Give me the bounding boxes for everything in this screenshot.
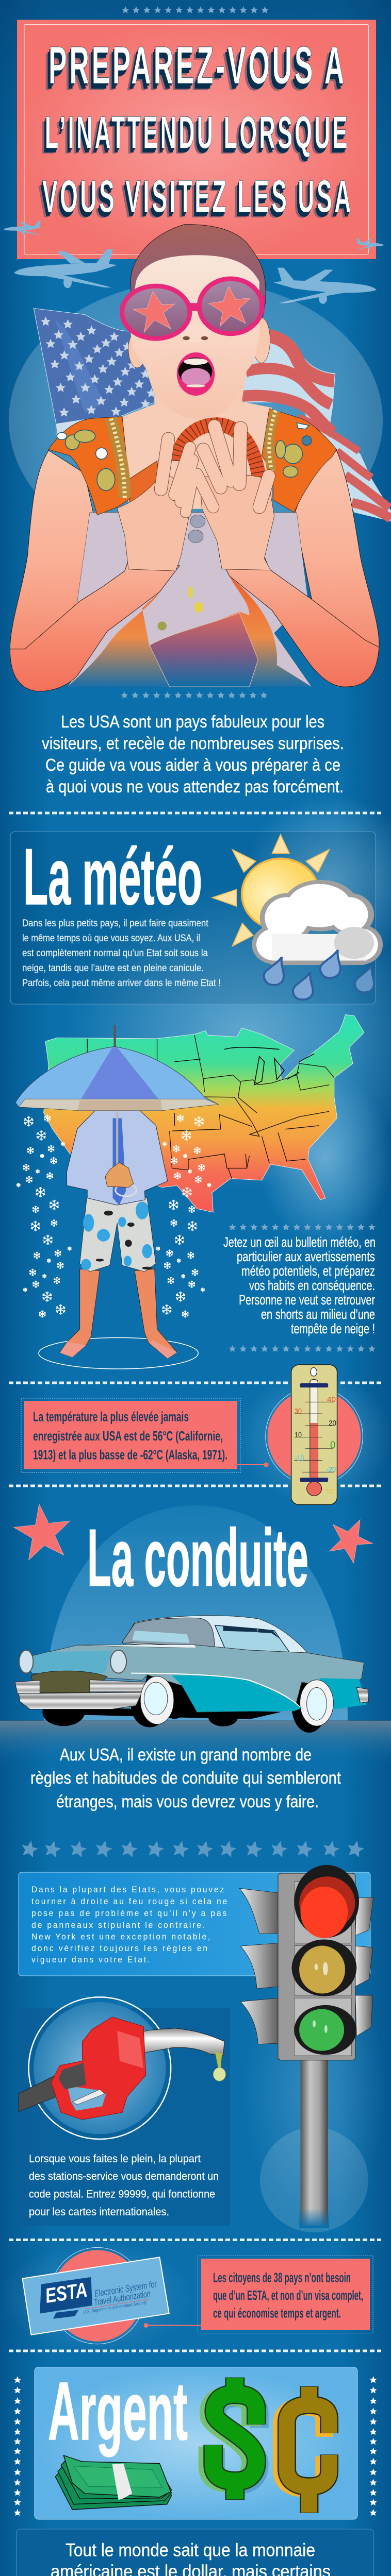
visors: [292, 1865, 359, 2055]
shorts: [80, 1198, 156, 1272]
teal fins: [172, 1675, 302, 1712]
text: feu rouge: New York est une exception notable,: [31, 1932, 211, 1941]
text: code postal: pour les cartes internationales.: [29, 2206, 169, 2218]
panel: code postal: [18, 2008, 230, 2226]
star row: after hero: [121, 691, 267, 699]
icon: planes: [4, 221, 384, 304]
text: conduite intro: [30, 1745, 341, 1811]
text: météo: le même temps où que vous soyez. Aux USA, il: [22, 933, 200, 944]
ears: [128, 317, 270, 368]
hair: [129, 225, 266, 335]
icon: cent sign: [282, 2386, 329, 2513]
text: météo: est complètement normal qu’un Etat soit sous la: [22, 948, 208, 959]
star row: top: [122, 6, 268, 13]
title: [38, 36, 353, 227]
shirt: [67, 1106, 168, 1205]
tires and underbody: [42, 1675, 327, 1733]
star row: driving: [20, 1839, 365, 1858]
disc: [29, 1997, 171, 2139]
face: [129, 255, 259, 419]
trigger opening: [68, 2086, 106, 2111]
rain drops: [264, 950, 374, 999]
text: conduite intro: Aux USA, il existe un grand nombre de: [60, 1745, 312, 1764]
text: conduite intro: règles et habitudes de conduite qui sembleront: [30, 1768, 341, 1787]
forearms: [10, 556, 379, 691]
state lines: [87, 1035, 334, 1179]
text: météo: [22, 918, 221, 989]
callout: temperature: [21, 1398, 268, 1472]
green light: [299, 2009, 344, 2051]
text: météo: Dans les plus petits pays, il peut faire quasiment: [22, 918, 209, 929]
windshield: [122, 1618, 215, 1648]
flower top details: [158, 586, 203, 631]
flag: stripes: [242, 330, 391, 521]
bag pouch: [150, 613, 258, 687]
wheels: [140, 1676, 333, 1726]
hero illustration: woman with flag: [9, 225, 391, 691]
illustration: traffic light: [239, 1865, 373, 2228]
bag straps: [68, 577, 312, 687]
halo behind la conduite: [44, 1505, 348, 1721]
callout: temperature: 1913) et la plus basse de -62°C (Alaska, 1971).: [33, 1447, 227, 1462]
text: feu rouge: pose pas de problème et qu’il n’y a pas: [31, 1908, 228, 1918]
icon: ESTA card: Electronic System for: [93, 2279, 158, 2299]
pole: [299, 2058, 329, 2228]
text: code postal: des stations-service vous demanderont un: [29, 2170, 219, 2182]
panel: argent: [35, 2367, 357, 2519]
intro text: [42, 712, 344, 796]
sun disc: [242, 858, 319, 929]
roof: [122, 1616, 308, 1654]
dress right: [262, 409, 337, 513]
icon: sun, cloud and rain: [213, 835, 383, 999]
man under umbrella: [39, 1106, 198, 1369]
buttons: [188, 515, 205, 543]
nose: [180, 324, 210, 343]
text: code postal: Lorsque vous faites le plein, la plupart: [29, 2153, 201, 2165]
icon: ESTA card: U.S. Department of Homeland Security: [83, 2300, 147, 2315]
umbrella shaft: [116, 1106, 136, 1196]
intro text: visiteurs, et recèle de nombreuses surprises.: [42, 734, 344, 753]
heading: la météo: La météo: [23, 832, 202, 921]
dividers: [9, 813, 381, 2576]
neck strap: [177, 425, 259, 504]
text: météo: Parfois, cela peut même arriver dans le même Etat !: [22, 978, 221, 989]
star rows: around bulletin: [229, 1224, 376, 1352]
body: [19, 1645, 364, 1712]
upper arms: [10, 450, 379, 651]
panel: feu rouge: [19, 1872, 370, 1976]
callout: temperature: La température la plus élevée jamais: [33, 1409, 189, 1424]
icon: thermometer: [266, 1365, 363, 1504]
hood highlight: [20, 1651, 112, 1673]
ground ring: [39, 1337, 198, 1369]
tie: [112, 1118, 126, 1205]
dress pattern: [57, 423, 312, 490]
icon: stack of bills: [55, 2455, 172, 2510]
headlights: [19, 1650, 126, 1673]
dress beaded bands: [111, 411, 275, 498]
callout: temperature: enregistrée aux USA est de 56°C (Californie,: [33, 1428, 223, 1444]
icon: thermometer: 10: [295, 1431, 302, 1439]
icon: thermometer: 40: [327, 1395, 336, 1404]
icon: thermometer: -20: [327, 1465, 336, 1474]
torso top: [68, 513, 312, 687]
traffic light pole halo: [260, 2127, 368, 2232]
map of the USA: [44, 1015, 364, 1212]
drop: [213, 2051, 225, 2081]
spout: [129, 2028, 224, 2058]
text: feu rouge: tourner à droite au feu rouge si cela ne: [31, 1896, 229, 1906]
icon: thermometer: 30: [295, 1407, 302, 1416]
icon: thermometer: 20: [329, 1419, 336, 1428]
legs: [60, 1269, 177, 1359]
icon: thermometer: °C: [325, 1487, 335, 1496]
shorts flowers: [81, 1201, 152, 1270]
feet: [60, 1340, 177, 1359]
icon: thermometer: -10: [295, 1454, 304, 1463]
wings: [239, 1888, 373, 2044]
sun rays: [213, 835, 329, 946]
mouth: [177, 352, 215, 396]
illustration: fuel nozzle: [19, 1997, 225, 2139]
umbrella: [15, 1025, 218, 1111]
text: feu rouge: vigueur dans votre Etat.: [31, 1955, 151, 1964]
sunglasses: [120, 279, 265, 338]
icon: ESTA card: ESTA: [44, 2279, 89, 2308]
text: feu rouge: [31, 1885, 229, 1964]
icons: red stars: [14, 1504, 373, 1563]
chest and neck: [120, 370, 272, 509]
text: feu rouge: Dans la plupart des Etats, vous pouvez: [31, 1885, 225, 1894]
text: météo: neige, tandis que l’autre est en pleine canicule.: [22, 963, 204, 974]
amber light: [299, 1946, 345, 1994]
text: feu rouge: de panneaux stipulant le contraire.: [31, 1920, 206, 1930]
star columns: [14, 2376, 377, 2516]
heading: argent: Argent: [48, 2365, 188, 2457]
panel: monnaie: [17, 2529, 373, 2576]
callout: ESTA: [143, 2256, 373, 2333]
hose: [19, 2061, 86, 2112]
flag: stars canton: [34, 309, 156, 435]
snowflakes: [17, 1114, 211, 1318]
panel: title background: [17, 20, 376, 259]
intro text: à quoi vous ne vous attendez pas forcément.: [46, 777, 344, 796]
road: [0, 1721, 391, 1764]
illustration: vintage car: [15, 1616, 368, 1733]
icon: ESTA card: Travel Authorization: [93, 2289, 151, 2308]
text: feu rouge: donc vérifiez toujours les règles en: [31, 1943, 209, 1953]
halo circle: [9, 280, 383, 561]
hand: [105, 1162, 134, 1188]
hands: [117, 427, 274, 571]
purse buckle: [129, 461, 159, 514]
text: code postal: code postal. Entrez 99999, qui fonctionne: [29, 2188, 215, 2200]
grille: [31, 1671, 107, 1692]
text: bulletin météo: [223, 1234, 376, 1336]
panel: monnaie: Tout le monde sait que la monnaie: [66, 2540, 315, 2561]
cloud: [252, 880, 383, 965]
icon: ESTA card: [23, 2247, 169, 2344]
side windows: [215, 1625, 290, 1654]
bumpers: [15, 1680, 368, 1709]
intro text: Ce guide va vous aider à vous préparer à ce: [45, 755, 340, 774]
text: conduite intro: étranges, mais vous devrez vous y faire.: [56, 1792, 319, 1811]
housing: [278, 1873, 355, 2060]
icon: thermometer: 0: [330, 1440, 336, 1451]
text: code postal: [29, 2153, 219, 2218]
dress left: [48, 417, 131, 515]
icon: dollar sign: [208, 2377, 259, 2500]
panel: la météo: [10, 832, 376, 1004]
red light: [299, 1876, 355, 1930]
nozzle body: [51, 2017, 146, 2120]
intro text: Les USA sont un pays fabuleux pour les: [61, 712, 324, 731]
